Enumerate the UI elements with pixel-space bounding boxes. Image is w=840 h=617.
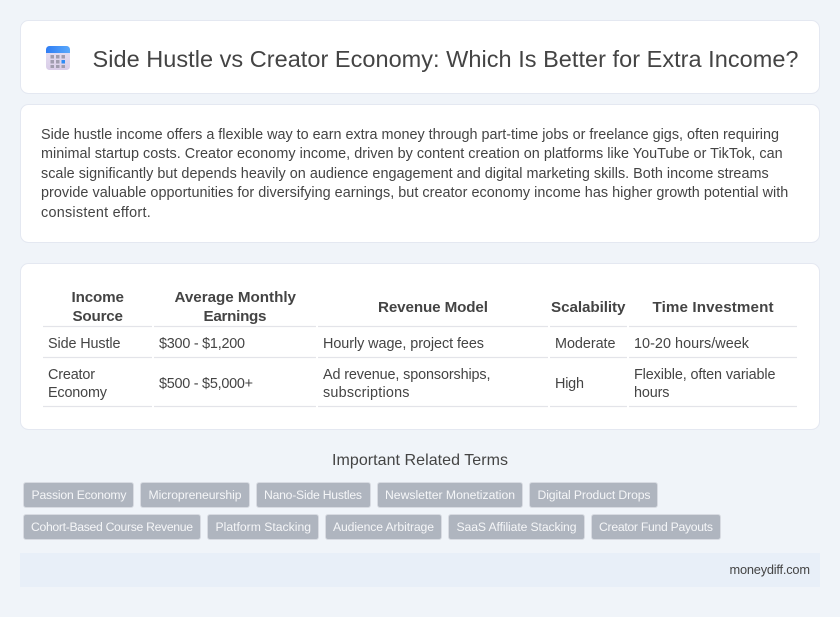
tag: Cohort-Based Course Revenue [31,520,193,534]
text block: summary: provide valuable opportunities for diversifying earnings, but creator economy income has higher growth potential with [41,185,788,201]
tag [448,514,584,540]
tag: SaaS Affiliate Stacking [456,520,576,534]
tag: Nano-Side Hustles [264,488,362,502]
table row: side hustle: Side Hustle [48,336,120,352]
table header row: Source [72,308,123,325]
table row: creator economy: High [555,376,584,392]
heading: related terms: Important Related Terms [332,452,508,469]
table row: side hustle [48,336,750,352]
table header row: Average Monthly [174,289,297,306]
table row: creator economy [48,367,776,401]
table row: side hustle: Hourly wage, project fees [323,336,484,352]
text block: summary: minimal startup costs. Creator economy income, driven by content creation on platforms like YouTube or TikTok, can [41,146,783,162]
table header row: Time Investment [652,299,774,316]
text block: summary: scale significantly but depends heavily on audience engagement and digital marketing skills. Both income streams [41,166,769,182]
tag [24,482,134,508]
tag [326,514,442,540]
tag list: related terms [24,482,720,540]
table header row: Income [72,289,124,306]
tag: Audience Arbitrage [333,520,434,534]
table row: creator economy: Flexible, often variable [634,367,776,383]
tag: Passion Economy [32,488,127,502]
footer source text: moneydiff.com [730,562,810,577]
panel: title card [20,20,820,94]
title: Side Hustle vs Creator Economy: Which Is Better for Extra Income? [92,46,798,72]
table row: creator economy: Ad revenue, sponsorships, [323,367,490,383]
table row: creator economy: Economy [48,385,108,401]
panel: summary paragraph [20,104,820,242]
tag: Newsletter Monetization [385,488,515,502]
tag [592,514,720,540]
text block: summary: Side hustle income offers a flexible way to earn extra money through part-time jobs or freelance gigs, often requiring [41,127,779,143]
table row: creator economy: subscriptions [323,385,410,401]
table row: side hustle: Moderate [555,336,616,352]
table row: side hustle: $300 - $1,200 [159,336,245,352]
tag: Micropreneurship [148,488,242,502]
panel: comparison table [20,264,820,430]
text block: summary: consistent effort. [41,205,151,221]
table header row: Earnings [204,308,266,325]
table row: creator economy: $500 - $5,000+ [159,376,253,392]
tag [208,514,318,540]
table header row [72,289,774,325]
table row: side hustle: 10-20 hours/week [634,336,750,352]
icon: calendar [46,46,70,70]
tag [140,482,250,508]
tag: Creator Fund Payouts [599,520,713,534]
tag [378,482,522,508]
tag: Digital Product Drops [538,488,650,502]
text block: summary [41,127,788,221]
tag [530,482,658,508]
table row: creator economy: hours [634,385,670,401]
table row: creator economy: Creator [48,367,95,383]
tag [24,514,200,540]
table header row: Scalability [551,299,626,316]
table header row: Revenue Model [378,299,488,316]
footer bar [20,553,820,587]
tag: Platform Stacking [216,520,311,534]
tag [256,482,370,508]
